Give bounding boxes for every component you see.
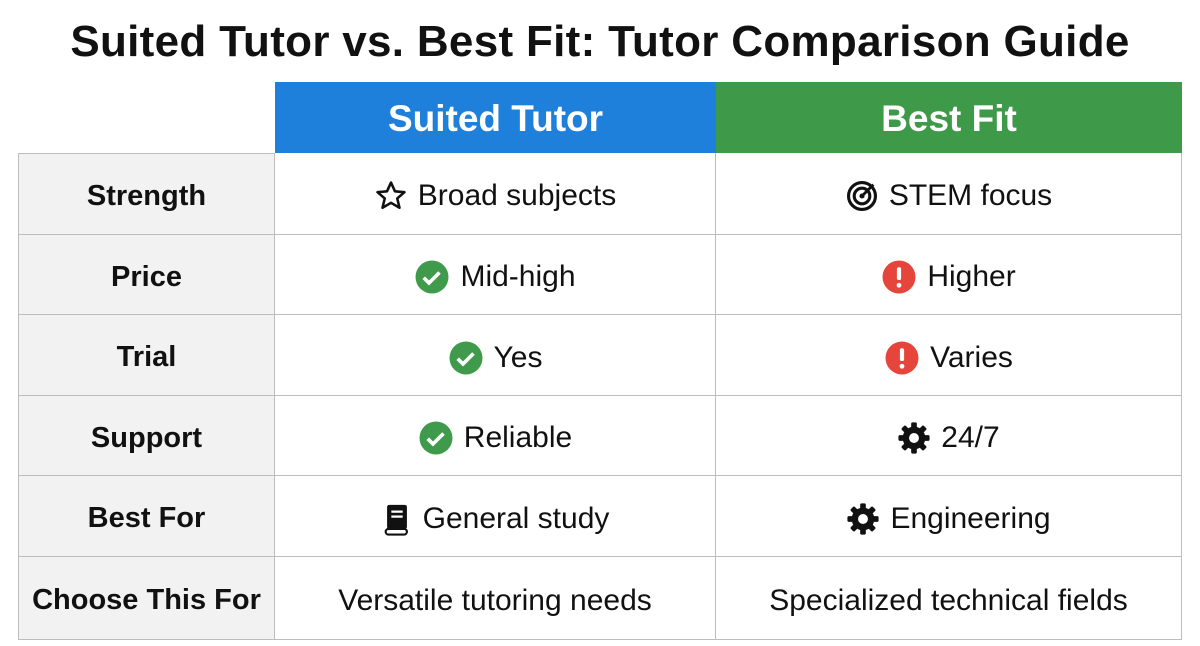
header: Best Fit: Best Fit (881, 98, 1017, 138)
header: Suited Tutor (275, 82, 716, 153)
table: Mid-high (460, 260, 576, 293)
table: STEM focus (889, 179, 1052, 212)
row: Strength (18, 153, 1182, 235)
table: Varies (930, 340, 1013, 374)
table: Versatile tutoring needs (338, 584, 652, 616)
row: Support (18, 396, 1182, 476)
table: Strength (87, 180, 206, 212)
row: Choose This For (18, 557, 1182, 640)
row: Trial (18, 315, 1182, 396)
table: Support (91, 422, 202, 454)
table: Engineering (890, 502, 1051, 534)
row: Best For (18, 476, 1182, 557)
table: Higher (927, 260, 1016, 293)
title: Suited Tutor vs. Best Fit: Tutor Comparison Guide (70, 17, 1130, 66)
header: Suited Tutor: Suited Tutor (388, 98, 603, 138)
table: General study (423, 502, 609, 534)
table: Broad subjects (418, 179, 616, 212)
table: Best For (88, 502, 205, 534)
row: Price (18, 235, 1182, 315)
table: Reliable (464, 421, 572, 454)
table: Specialized technical fields (769, 584, 1128, 616)
table: Price (111, 260, 182, 292)
header: Best Fit (716, 82, 1182, 153)
table: 24/7 (941, 421, 1000, 454)
table: Choose This For (32, 584, 261, 616)
table: Yes (494, 340, 542, 374)
table: Trial (117, 341, 176, 373)
